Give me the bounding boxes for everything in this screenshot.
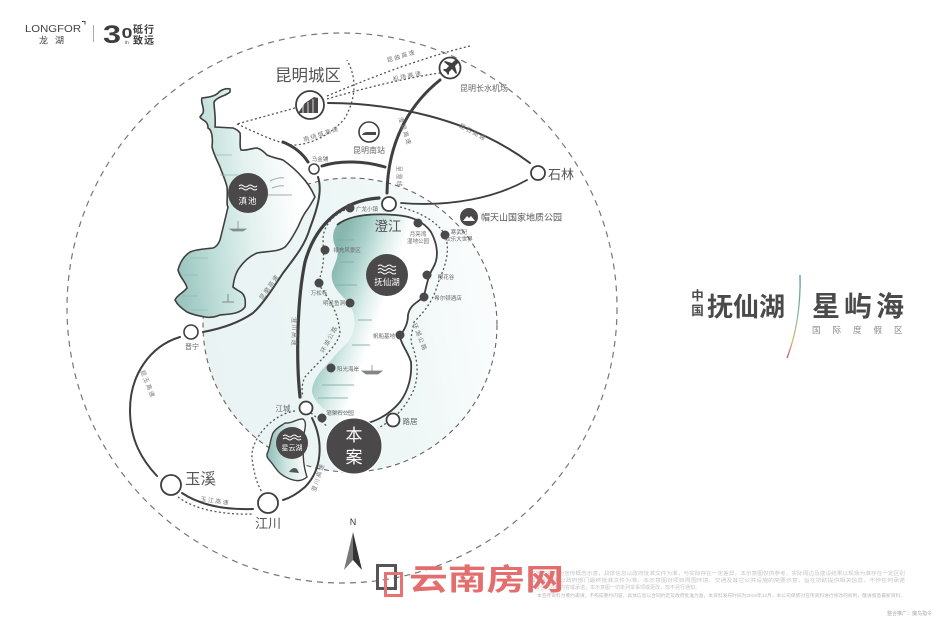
road labels: 澄川高速 (290, 317, 298, 347)
road labels: 环湖公路 (411, 322, 429, 353)
road labels: 玉江高速 (200, 495, 231, 507)
node: Kunming South station (359, 122, 379, 142)
road labels: 呈澄线 (395, 166, 403, 188)
logo: Longfor 30th (25, 21, 154, 49)
road labels: 环湖公路 (319, 324, 340, 354)
label: Kunming airport: 昆明长水机场 (460, 83, 508, 93)
scenic markers and labels: 月亮湾 (410, 230, 427, 238)
road labels: 昆曲高速 (386, 48, 417, 64)
outer dashed range circle (67, 33, 617, 583)
node: Jiangcheng (300, 402, 312, 414)
title: Fuxian Lake Xingyuhai: 国际度假区 (812, 325, 915, 335)
dotted scenic loop around Fuxian lake (252, 207, 447, 492)
node: Chengjiang (382, 197, 396, 211)
road labels: 昆玉高速 (139, 369, 157, 400)
label: Yuxi: 玉溪 (185, 470, 216, 488)
logo: Longfor 30th: 致远 (133, 34, 154, 47)
road: Majinpu to Jinning (203, 177, 320, 332)
road: airport to Chengjiang (387, 80, 440, 193)
title: Fuxian Lake Xingyuhai (691, 275, 915, 358)
badge: project location: 本 (346, 426, 362, 445)
node: Jinning (184, 325, 198, 339)
watermark: Yunnan real-estate site: 云南房网 (409, 564, 564, 597)
logo: Longfor 30th: 湖 (55, 36, 64, 46)
label: Jinning: 晋宁 (185, 342, 199, 351)
node: Yuxi (161, 475, 181, 495)
node: Luju (386, 414, 400, 426)
road: Jiangcheng to Jiangchuan (283, 418, 320, 500)
road labels (139, 48, 488, 507)
label: Shilin: 石林 (548, 167, 574, 182)
lake: Xingyun (267, 419, 307, 481)
dashed roads around Kunming (237, 46, 470, 145)
label: Jiangchuan: 江川 (255, 516, 281, 531)
scenic markers and labels: 笔架石公园 (326, 409, 354, 417)
badge: project location (326, 418, 382, 474)
disclaimer text: 本宣传资料为宣传概念示意，具体信息以政府批准文件为准，与实际存在一定差异，本示意图仅供参考，实际周边及建设结果以现场为准存在一定区别 (530, 570, 905, 577)
label: Majinpu: 马金铺 (312, 155, 329, 163)
node: Majinpu (309, 164, 319, 174)
disclaimer text: 本宣传资料为要约邀请，不构成要约内容，具体信息以合同约定及政府批准为准，本资料发布时间为2019年12月，本公司保留对宣传资料进行修改的权利，敬请留意最新资料。 (537, 592, 905, 599)
compass north arrow: N (350, 517, 356, 527)
watermark: Yunnan real-estate site (378, 564, 564, 597)
title: Fuxian Lake Xingyuhai: 抚仙湖 (707, 292, 785, 322)
label: Maotianshan geopark: 帽天山国家地质公园 (481, 212, 562, 222)
road: Chengchuan expressway (298, 198, 379, 397)
road labels: 澄川高速 (310, 462, 327, 493)
compass north arrow (344, 517, 362, 570)
node: Kunming city (296, 91, 324, 119)
logo: Longfor 30th: 3 (103, 21, 121, 49)
label: Kunming city: 昆明城区 (275, 66, 341, 85)
scenic markers and labels: 寒武纪 (451, 228, 468, 236)
road labels: 昆磨高速 (257, 272, 281, 301)
node: Maotianshan geopark (460, 208, 478, 226)
lake: Fuxian (312, 214, 437, 423)
scenic markers and labels: 欢乐大世界 (445, 235, 473, 243)
road labels: 澄昆高速 (396, 116, 413, 147)
scenic markers and labels: 禄充风景区 (333, 246, 361, 254)
scenic markers and labels: 樱花谷 (438, 273, 455, 281)
logo: Longfor 30th: 0 (122, 25, 132, 42)
scenic markers and labels: 希尔顿酒店 (434, 294, 462, 302)
node: Jiangchuan (258, 493, 278, 513)
disclaimer text (530, 570, 932, 617)
road: Majinpu to Chengjiang line (322, 162, 385, 167)
badge: Fuxian lake: 抚仙湖 (374, 277, 400, 287)
inner dashed range circle (203, 178, 497, 472)
node: Kunming airport (440, 58, 460, 78)
title: Fuxian Lake Xingyuhai: 国 (691, 304, 704, 318)
badge: Xingyun lake: 星云湖 (282, 443, 302, 452)
road: Chengjiang to Shilin (401, 180, 527, 204)
label: Chengjiang: 澄江 (374, 219, 402, 234)
node: Shilin (531, 166, 545, 180)
scenic markers and labels: 湿地公园 (407, 237, 429, 245)
scenic markers and labels (311, 204, 473, 422)
label: Jiangcheng: 江城 (276, 404, 291, 413)
road: Kunshi expressway (328, 103, 530, 163)
scenic markers and labels: 广龙小镇 (356, 205, 378, 213)
label: Luju: 路居 (402, 416, 418, 426)
disclaimer text: 整合推广：魔鸟指令 (887, 610, 932, 617)
logo: Longfor 30th: 龙 (39, 34, 48, 46)
logo: Longfor 30th: th (125, 40, 129, 45)
scenic markers and labels: 阳光海岸 (337, 365, 359, 373)
title: Fuxian Lake Xingyuhai: 星屿海 (812, 291, 908, 322)
title: Fuxian Lake Xingyuhai: 中 (691, 288, 704, 303)
label: Kunming South station: 昆明南站 (353, 145, 385, 155)
logo: Longfor 30th: LONGFOR (25, 23, 81, 35)
badge: Dianchi lake (228, 173, 268, 213)
badge: project location: 案 (346, 448, 362, 467)
road: Yujiang expressway (182, 493, 253, 509)
road labels: 昆石高速 (458, 122, 488, 143)
scenic markers and labels: 明星鱼洞 (323, 299, 345, 307)
lake: Dianchi (175, 89, 315, 317)
road: Kunming to Majinpu (283, 142, 308, 162)
disclaimer text: 构成任何合约内容或承诺，本示意图一切未列举事项或更改，恕不另行通知。 (530, 584, 700, 591)
scenic markers and labels: 帆船基地 (373, 332, 395, 340)
badge: Xingyun lake (276, 427, 308, 459)
road: dotted Yujiang service road (178, 497, 253, 514)
badge: Dianchi lake: 滇池 (238, 196, 258, 206)
road labels: 南绕城高速 (302, 124, 340, 144)
scenic markers and labels: 万松寺 (311, 289, 328, 297)
road: Jinning to Yuxi (130, 337, 180, 476)
badge: Fuxian lake (366, 254, 408, 296)
road labels: 机场高速 (392, 69, 423, 83)
disclaimer text: 域规划结果以政府部门最终批准文件为准，本示意图对项目周围环境、交通及其它公共设施的简要示意，旨在协助提供相关信息，不作任何承诺 (530, 577, 905, 584)
logo: Longfor 30th: 砥行 (133, 23, 154, 36)
